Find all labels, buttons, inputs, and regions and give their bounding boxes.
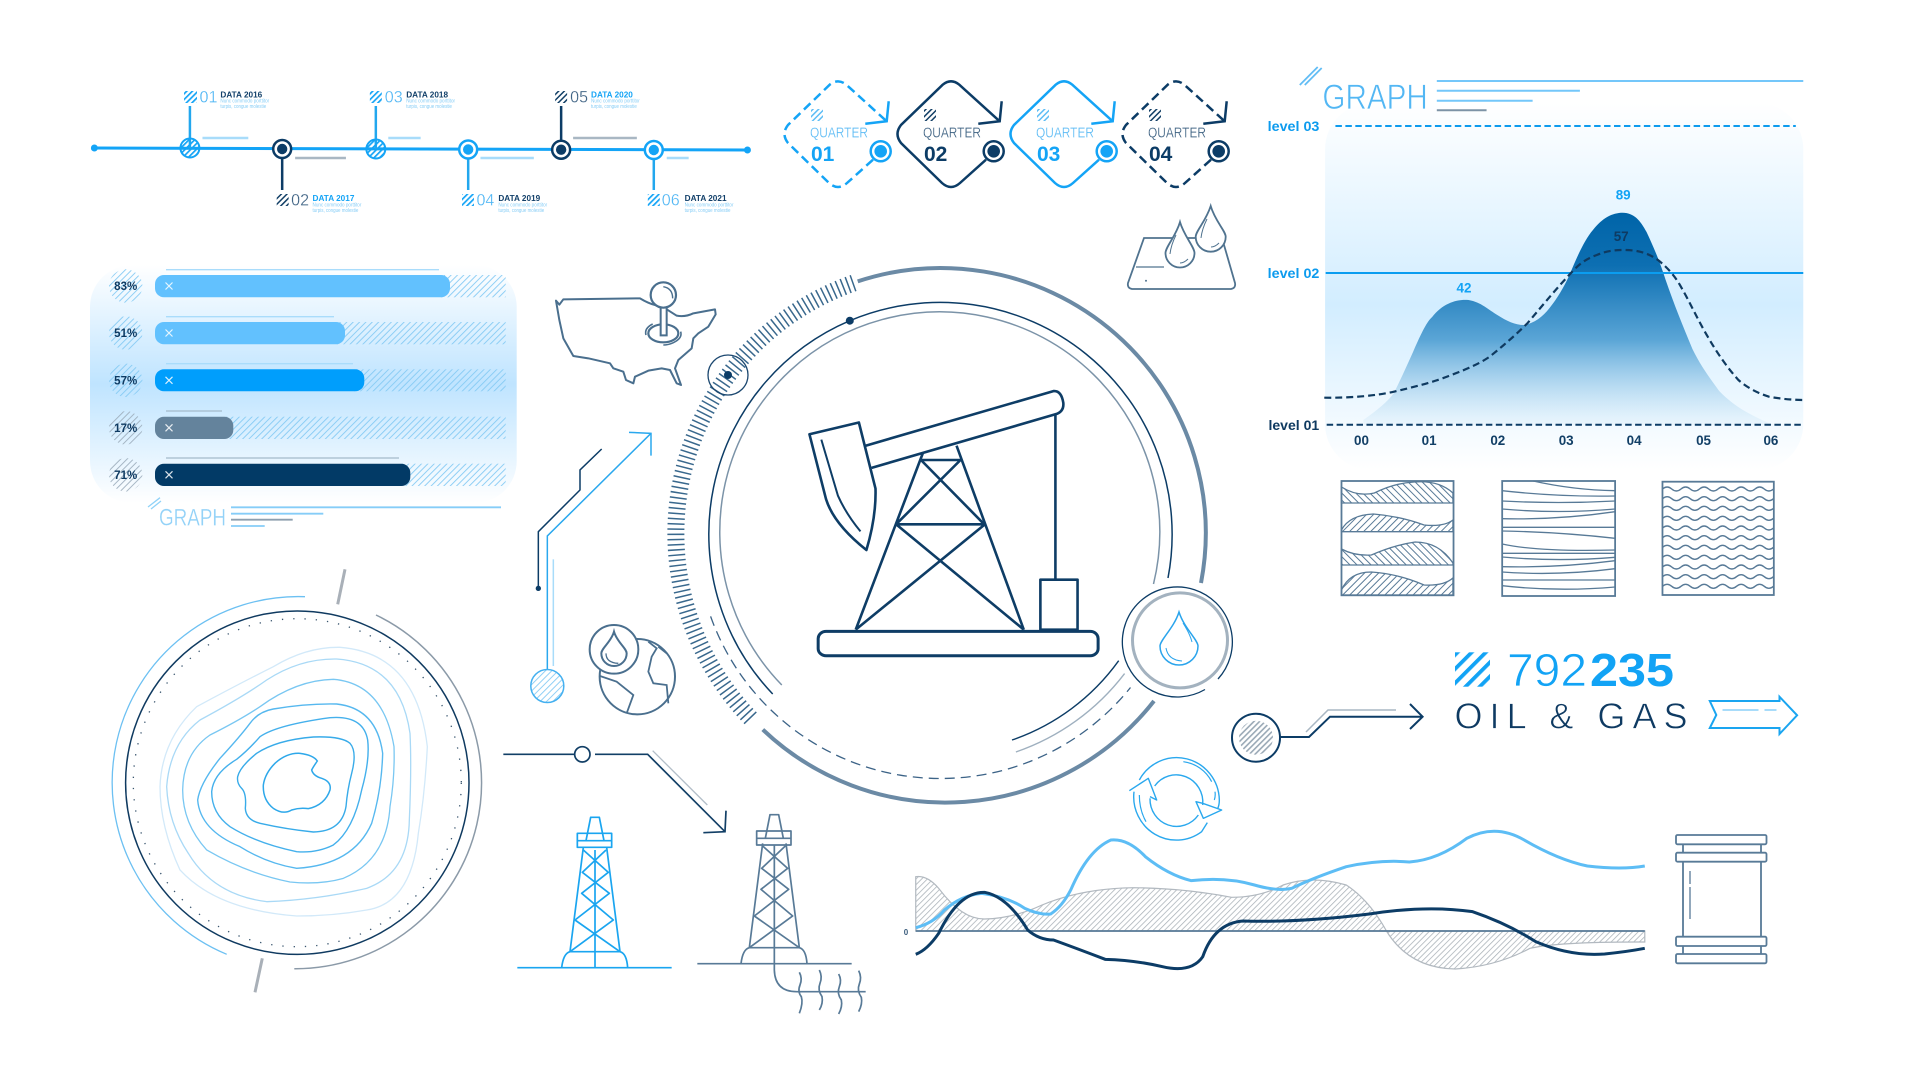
timeline label 03: 03 <box>385 87 403 107</box>
timeline label 03: DATA 2018 <box>406 89 448 100</box>
percent badges <box>109 269 142 491</box>
quarter 03 <box>1010 81 1117 187</box>
timeline label 04: turpis, congue molestie <box>498 208 544 214</box>
base <box>818 631 1098 656</box>
level labels: level 02 <box>1268 265 1320 281</box>
counterweight <box>1040 580 1078 630</box>
bar 83% <box>155 275 450 297</box>
icon: barrel <box>1676 835 1766 963</box>
wave plot <box>916 831 1645 969</box>
axis labels: 02 <box>1490 433 1505 448</box>
timeline label 06: Nunc commodo porttitor <box>685 202 734 209</box>
hatched ring <box>676 283 854 721</box>
timeline axis <box>91 144 751 154</box>
horsehead inner line <box>821 440 860 531</box>
ring marker dot <box>846 317 854 325</box>
icon: oil drops on flask <box>1128 206 1235 289</box>
axis labels: 00 <box>1354 433 1369 448</box>
quarter 02: 02 <box>924 143 947 166</box>
timeline label 06: DATA 2021 <box>685 193 727 203</box>
quarter 03: 03 <box>1037 143 1060 166</box>
quarter 01: QUARTER <box>810 125 868 142</box>
derrick <box>856 446 1024 630</box>
lower right arcs <box>1012 661 1119 740</box>
value labels: 42 <box>1457 280 1471 296</box>
panel: quarters <box>784 81 1229 187</box>
graph background <box>1325 103 1803 470</box>
quarter 01: 01 <box>811 143 835 166</box>
timeline label 05: turpis, congue molestie <box>591 104 637 110</box>
strata square 3 <box>1662 482 1774 595</box>
timeline label 02 <box>277 190 362 214</box>
icon: globe with drop <box>590 625 675 714</box>
pitman rod <box>1054 414 1057 580</box>
bar top rules <box>166 270 439 458</box>
contour outer arcs <box>112 597 482 969</box>
quarter 04: 04 <box>1149 143 1173 166</box>
timeline label 06: 06 <box>662 190 680 210</box>
percent labels: 83% <box>114 281 137 293</box>
arrow: hatched node connector <box>1232 704 1423 762</box>
bar cross marks <box>166 282 172 478</box>
contour ticks <box>255 569 345 992</box>
panel: timeline <box>91 87 751 214</box>
level lines <box>1326 126 1803 425</box>
timeline label 01: turpis, congue molestie <box>220 104 266 110</box>
area series <box>1363 213 1773 425</box>
walking beam <box>866 391 1063 468</box>
dark series <box>916 892 1645 969</box>
bars title: GRAPH <box>159 504 226 532</box>
axis labels <box>1354 433 1778 448</box>
panel: contour map <box>112 569 482 992</box>
dark ring <box>709 302 1172 694</box>
percent labels: 51% <box>114 328 137 340</box>
timeline label 05 <box>555 87 640 110</box>
chart: wave lines <box>904 831 1645 969</box>
quarter 03: QUARTER <box>1036 125 1094 142</box>
baseline <box>916 930 1645 932</box>
timeline label 06: turpis, congue molestie <box>685 208 731 214</box>
panel: progress bars <box>90 265 517 532</box>
zero label: 0 <box>904 928 909 937</box>
horsehead <box>809 422 876 550</box>
timeline label 01: 01 <box>199 87 217 107</box>
graph title: GRAPH <box>1322 78 1428 117</box>
strata square 2 <box>1502 481 1615 596</box>
value labels: 89 <box>1616 187 1631 203</box>
icon: hatched node <box>531 670 564 702</box>
strata square 1 <box>1341 481 1454 595</box>
quarter 01 <box>784 81 891 187</box>
dashed ring <box>711 616 1130 778</box>
icon: blue derrick <box>517 817 672 968</box>
level labels: level 01 <box>1268 417 1319 433</box>
bar 51% <box>155 322 345 344</box>
axis labels: 03 <box>1559 433 1574 448</box>
icon: recycle arrows <box>1129 758 1222 840</box>
percent labels: 17% <box>114 423 137 435</box>
bars background <box>90 265 517 503</box>
pumpjack <box>809 391 1098 656</box>
timeline label 03: turpis, congue molestie <box>406 104 452 110</box>
number 792235: 235 <box>1590 644 1674 696</box>
icon: hollow arrow <box>1710 697 1797 734</box>
hatched area series <box>916 876 1645 969</box>
contour lines <box>160 647 427 916</box>
timeline label 04: DATA 2019 <box>498 193 540 203</box>
percent labels: 57% <box>114 376 137 388</box>
arrow: connector to derrick <box>503 747 726 833</box>
gray ring <box>720 312 1160 685</box>
dashed series <box>1324 250 1805 400</box>
percent labels <box>114 281 137 482</box>
timeline label 02: 02 <box>291 190 309 210</box>
timeline label 03 <box>370 87 455 110</box>
contour main circle <box>126 611 469 954</box>
axis labels: 04 <box>1627 433 1642 448</box>
icon: USA map with pin <box>556 282 716 385</box>
timeline label 04: 04 <box>476 190 494 210</box>
axis labels: 06 <box>1763 433 1778 448</box>
timeline label 05: DATA 2020 <box>591 89 633 100</box>
percent labels: 71% <box>114 470 137 482</box>
ring lens marker <box>708 355 748 395</box>
timeline label 02: Nunc commodo porttitor <box>313 202 362 209</box>
title oil and gas: OIL & GAS <box>1454 696 1688 737</box>
arrow: rising circuit <box>536 432 651 669</box>
quarter 02 <box>898 81 1004 187</box>
drop badge <box>1122 587 1232 697</box>
bars title <box>148 498 501 532</box>
headline number block <box>1454 644 1688 737</box>
timeline label 03: Nunc commodo porttitor <box>406 98 455 105</box>
timeline label 06 <box>648 190 734 214</box>
timeline label 05: 05 <box>570 87 588 107</box>
level labels: level 03 <box>1268 118 1320 134</box>
bar 57% <box>155 369 364 391</box>
contour dotted circle <box>133 619 461 947</box>
timeline label 01: DATA 2016 <box>220 89 263 100</box>
timeline label 04 <box>462 190 547 214</box>
number hatch <box>1455 652 1490 687</box>
thick outer ring <box>763 268 1206 803</box>
value labels: 57 <box>1614 229 1629 244</box>
quarter 04 <box>1122 81 1229 187</box>
light blue series <box>916 831 1645 928</box>
axis labels: 01 <box>1422 433 1437 448</box>
timeline stems and bars <box>190 106 689 190</box>
timeline label 02: DATA 2017 <box>313 193 355 203</box>
level labels <box>1268 118 1320 433</box>
timeline label 05: Nunc commodo porttitor <box>591 98 640 105</box>
timeline label 01: Nunc commodo porttitor <box>220 98 270 105</box>
timeline nodes <box>180 138 663 159</box>
hatched tracks <box>223 275 506 486</box>
gray lower right arc <box>1016 674 1125 752</box>
number 792235: 792 <box>1507 644 1587 696</box>
timeline label 01 <box>184 87 270 110</box>
icon: gray derrick with wells <box>697 815 866 1014</box>
graph title <box>1300 67 1803 117</box>
panel: rock strata <box>1341 481 1774 596</box>
panel: central pumpjack <box>676 268 1232 803</box>
timeline label 02: turpis, congue molestie <box>313 208 359 214</box>
value labels <box>1457 187 1631 296</box>
quarter 04: QUARTER <box>1148 125 1206 142</box>
timeline label 04: Nunc commodo porttitor <box>498 202 547 209</box>
axis labels: 05 <box>1696 433 1712 448</box>
quarter 02: QUARTER <box>923 125 981 142</box>
panel: area graph <box>1268 67 1805 470</box>
bar 17% <box>155 417 233 439</box>
bar 71% <box>155 464 410 486</box>
